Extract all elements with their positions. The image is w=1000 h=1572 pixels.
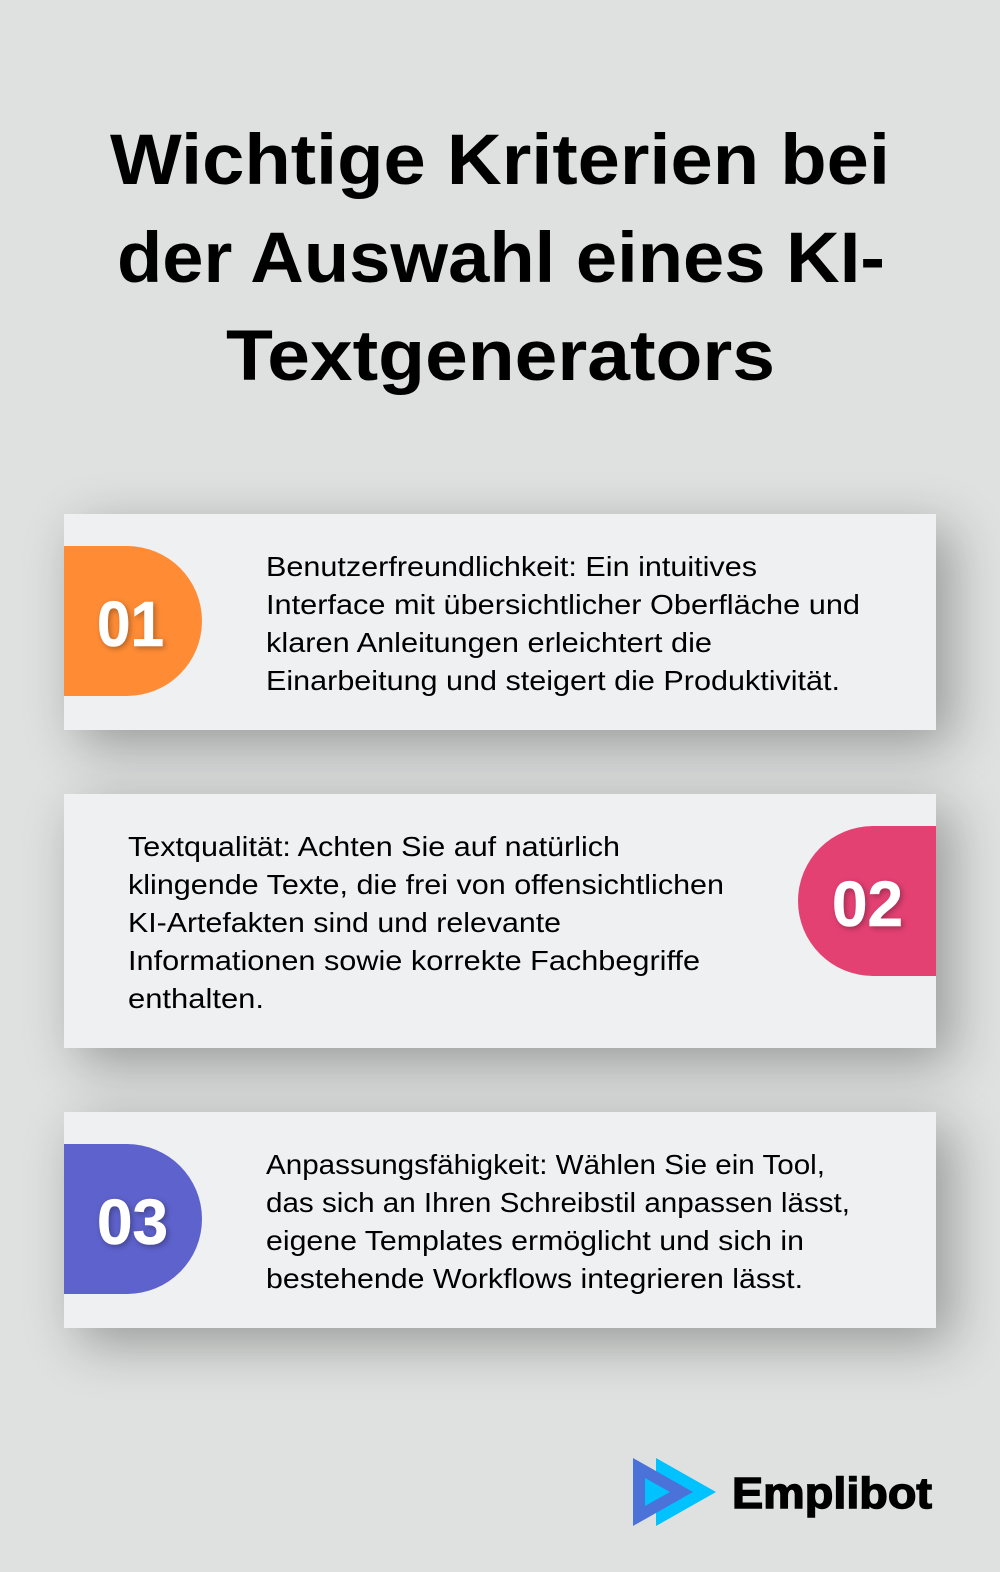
panel: criterion 01: [64, 514, 936, 730]
text: Textqualität: enthalten.: [128, 983, 264, 1014]
text: Anpassungsfähigkeit: Anpassungsfähigkeit: Wählen Sie ein Tool,: [266, 1149, 825, 1180]
text: Anpassungsfähigkeit: das sich an Ihren Schreibstil anpassen lässt,: [266, 1187, 850, 1218]
text: Textqualität: Textqualität: Achten Sie auf natürlich: [128, 831, 620, 862]
text: Anpassungsfähigkeit: bestehende Workflows integrieren lässt.: [266, 1263, 803, 1294]
badge 02: [798, 826, 936, 976]
title: Wichtige Kriterien bei: [110, 121, 890, 200]
text: Benutzerfreundlichkeit: Benutzerfreundlichkeit: Ein intuitives: [266, 551, 757, 582]
text: Anpassungsfähigkeit: eigene Templates ermöglicht und sich in: [266, 1225, 804, 1256]
title: [110, 121, 890, 396]
text: Anpassungsfähigkeit: [266, 1149, 850, 1294]
text: Benutzerfreundlichkeit: klaren Anleitungen erleichtert die: [266, 627, 712, 658]
text: Benutzerfreundlichkeit: [266, 551, 860, 696]
text: Benutzerfreundlichkeit: Einarbeitung und steigert die Produktivität.: [266, 665, 840, 696]
title: Textgenerators: [226, 317, 775, 396]
panel: criterion 03: [64, 1112, 936, 1328]
badge 03: 03: [97, 1186, 168, 1258]
badge 01: [64, 546, 202, 696]
title: der Auswahl eines KI-: [117, 219, 885, 298]
icon: play triangles: [633, 1458, 716, 1526]
wordmark: Emplibot: [732, 1469, 932, 1518]
text: Textqualität: [128, 831, 724, 1014]
text: Textqualität: Informationen sowie korrekte Fachbegriffe: [128, 945, 700, 976]
text: Benutzerfreundlichkeit: Interface mit übersichtlicher Oberfläche und: [266, 589, 860, 620]
panel: criterion 02: [64, 794, 936, 1048]
badge 03: [64, 1144, 202, 1294]
logo: Emplibot: [633, 1458, 932, 1526]
text: Textqualität: klingende Texte, die frei von offensichtlichen: [128, 869, 724, 900]
text: Textqualität: KI-Artefakten sind und relevante: [128, 907, 561, 938]
badge 01: 01: [97, 588, 164, 660]
badge 02: 02: [832, 868, 903, 940]
